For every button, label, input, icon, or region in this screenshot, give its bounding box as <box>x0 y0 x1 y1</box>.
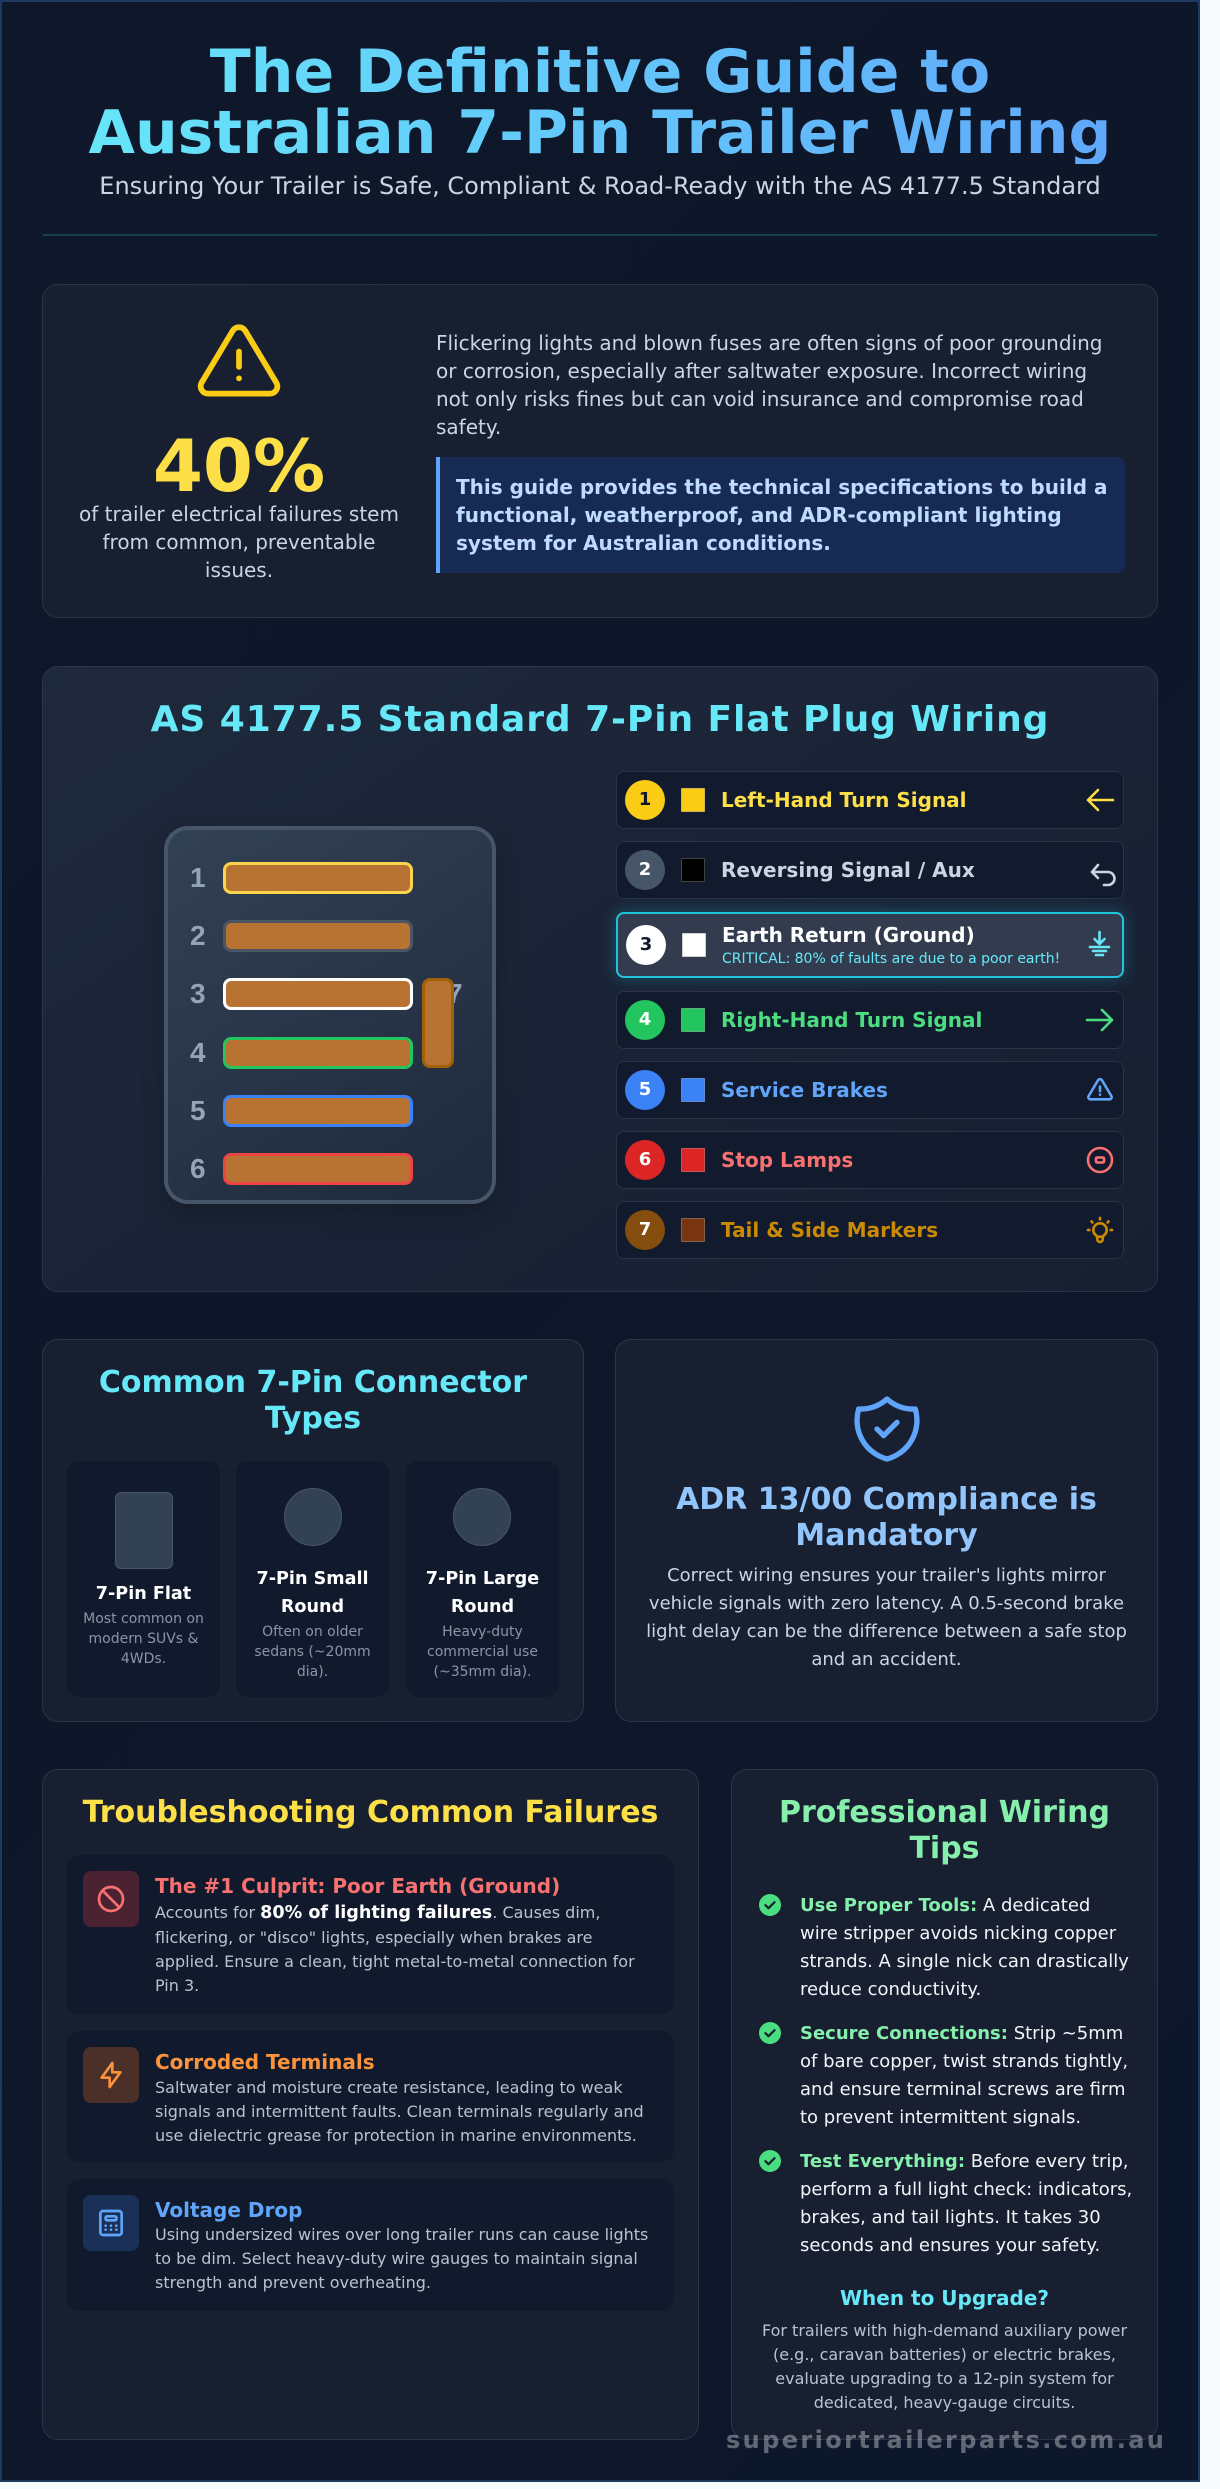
tip: test everything: Test Everything: Before every trip, <box>800 2151 1128 2172</box>
wire swatch <box>681 788 705 812</box>
connector description <box>83 1611 204 1667</box>
pin 1 <box>223 862 413 894</box>
heading: troubleshooting: Troubleshooting Common Failures <box>83 1795 658 1830</box>
connector name: 7-Pin Large <box>426 1569 539 1589</box>
icon: check 1 <box>759 1894 781 1916</box>
tip: secure connections <box>800 2023 1128 2128</box>
pin badge <box>626 925 666 965</box>
icon: large round plug <box>453 1488 511 1546</box>
heading: professional tips: Tips <box>909 1831 980 1866</box>
pin badge <box>625 850 665 890</box>
intro paragraph: not only risks fines but can void insurance and compromise road <box>436 387 1084 411</box>
footer: website: superiortrailerparts.com.au <box>726 2426 1166 2454</box>
connector name: 7-Pin Small <box>256 1569 369 1589</box>
tip: proper tools: strands. A single nick can drastically <box>800 1951 1129 1972</box>
legend row: pin 4 <box>616 991 1124 1049</box>
icon: shield check <box>854 1396 920 1462</box>
callout text <box>456 475 1107 555</box>
pin number 4: 4 <box>190 1037 206 1068</box>
heading: ADR compliance: Mandatory <box>795 1518 978 1553</box>
pin badge: 1 <box>639 789 651 810</box>
card: voltage drop <box>67 2179 674 2311</box>
callout: guide purpose <box>436 457 1125 573</box>
connector description: dia). <box>297 1664 328 1680</box>
title: The Definitive Guide to <box>210 37 990 107</box>
pin function: Service Brakes <box>721 1078 888 1102</box>
panel: professional tips <box>731 1769 1158 2440</box>
heading: professional tips <box>779 1795 1110 1866</box>
wire swatch <box>681 1148 705 1172</box>
pin function: Earth Return (Ground) <box>722 923 975 947</box>
connector description: commercial use <box>427 1644 538 1660</box>
card text: Using undersized wires over long trailer runs can cause lights <box>155 2225 648 2244</box>
card text <box>155 1903 635 1995</box>
card text: signals and intermittent faults. Clean terminals regularly and <box>155 2102 644 2121</box>
stat description: of trailer electrical failures stem <box>79 502 399 526</box>
card heading: The #1 Culprit: Poor Earth (Ground) <box>155 1874 560 1898</box>
tip: test everything: seconds and ensures your safety. <box>800 2235 1100 2256</box>
connector name <box>256 1569 369 1617</box>
card: 7-pin small round <box>236 1461 389 1697</box>
critical note: CRITICAL: 80% of faults are due to a poor earth! <box>722 951 1060 967</box>
card heading: Corroded Terminals <box>155 2050 375 2074</box>
pin 4 <box>223 1037 413 1069</box>
card text: strength and prevent overheating. <box>155 2273 431 2292</box>
heading: connector types: Types <box>265 1401 361 1436</box>
card: corroded terminals <box>67 2031 674 2162</box>
pin number 5: 5 <box>190 1095 206 1126</box>
tip: proper tools: wire stripper avoids nicking copper <box>800 1923 1116 1944</box>
tip: secure connections: and ensure terminal screws are firm <box>800 2079 1126 2100</box>
card text <box>155 2225 648 2292</box>
connector name: Round <box>281 1597 344 1617</box>
intro paragraph: safety. <box>436 415 501 439</box>
pin badge <box>625 780 665 820</box>
pin number 7: 7 <box>447 978 463 1009</box>
callout text: functional, weatherproof, and ADR-compliant lighting <box>456 503 1062 527</box>
pin function: Left-Hand Turn Signal <box>721 788 967 812</box>
icon: bolt <box>83 2047 139 2103</box>
tip: proper tools: reduce conductivity. <box>800 1979 981 2000</box>
icon: stop <box>1086 1146 1114 1174</box>
stat description: from common, preventable <box>102 530 375 554</box>
icon: ground <box>1088 930 1110 956</box>
icon: small round plug <box>284 1488 342 1546</box>
wire swatch <box>681 1218 705 1242</box>
connector description: Most common on <box>83 1611 204 1627</box>
icon: reverse arrow <box>1090 864 1116 886</box>
legend row: pin 2 <box>616 841 1124 899</box>
heading: connector types <box>99 1365 527 1436</box>
icon: right arrow <box>1086 1008 1114 1032</box>
heading: ADR compliance: ADR 13/00 Compliance is <box>676 1482 1097 1517</box>
tip: proper tools: Use Proper Tools: A dedicated <box>800 1895 1090 1916</box>
pin 6 <box>223 1153 413 1185</box>
pin 3 <box>223 978 413 1010</box>
heading: connector types: Common 7-Pin Connector <box>99 1365 527 1400</box>
pin badge: 5 <box>639 1079 651 1100</box>
icon: brake warning <box>1087 1078 1113 1101</box>
connector description: modern SUVs & <box>89 1631 198 1647</box>
connector name: Round <box>451 1597 514 1617</box>
connector name <box>426 1569 539 1617</box>
tip: secure connections: Secure Connections: Strip ~5mm <box>800 2023 1123 2044</box>
subheading: when to upgrade: When to Upgrade? <box>840 2286 1049 2310</box>
compliance text: Correct wiring ensures your trailer's lights mirror <box>667 1565 1106 1586</box>
pin badge <box>625 1210 665 1250</box>
wire swatch <box>681 1078 705 1102</box>
heading: professional tips: Professional Wiring <box>779 1795 1110 1830</box>
card heading: Voltage Drop <box>155 2198 302 2222</box>
heading: wiring standard: AS 4177.5 Standard 7-Pin Flat Plug Wiring <box>151 699 1049 740</box>
card text: Pin 3. <box>155 1976 199 1995</box>
connector description: 4WDs. <box>121 1651 166 1667</box>
tip: test everything <box>800 2151 1132 2256</box>
icon: flat plug <box>115 1492 173 1569</box>
pin badge: 7 <box>639 1219 651 1240</box>
pin function: Tail & Side Markers <box>721 1218 938 1242</box>
pin function: Right-Hand Turn Signal <box>721 1008 982 1032</box>
pin function: Reversing Signal / Aux <box>721 858 975 882</box>
pin function: Stop Lamps <box>721 1148 853 1172</box>
legend row: pin 6 <box>616 1131 1124 1189</box>
title <box>43 42 1157 164</box>
card text: Saltwater and moisture create resistance, leading to weak <box>155 2078 623 2097</box>
card: 7-pin flat <box>67 1461 220 1697</box>
card: poor earth <box>67 1855 674 2014</box>
pin number 3: 3 <box>190 978 206 1009</box>
pin 5 <box>223 1095 413 1127</box>
subtitle: Ensuring Your Trailer is Safe, Compliant & Road-Ready with the AS 4177.5 Standard <box>99 172 1101 200</box>
wire swatch <box>681 858 705 882</box>
connector description: sedans (~20mm <box>254 1644 371 1660</box>
pin badge: 6 <box>639 1149 651 1170</box>
panel: connector types <box>42 1339 584 1722</box>
intro paragraph: or corrosion, especially after saltwater exposure. Incorrect wiring <box>436 359 1087 383</box>
panel: ADR compliance <box>615 1339 1158 1722</box>
legend row: pin 3 highlighted <box>616 912 1124 978</box>
legend row: pin 7 <box>616 1201 1124 1259</box>
intro paragraph <box>436 331 1102 439</box>
panel: 7-pin wiring standard <box>42 666 1158 1292</box>
icon: light bulb <box>1086 1216 1114 1244</box>
compliance text: light delay can be the difference between a safe stop <box>646 1621 1127 1642</box>
pin 2 <box>223 920 413 952</box>
compliance text: vehicle signals with zero latency. A 0.5-second brake <box>649 1593 1124 1614</box>
connector description: Often on older <box>262 1624 363 1640</box>
legend row: pin 1 <box>616 771 1124 829</box>
tip: test everything: brakes, and tail lights. It takes 30 <box>800 2207 1101 2228</box>
intro paragraph: Flickering lights and blown fuses are often signs of poor grounding <box>436 331 1102 355</box>
compliance text: and an accident. <box>811 1649 962 1670</box>
pin number 1: 1 <box>190 862 206 893</box>
tip: secure connections: of bare copper, twist strands tightly, <box>800 2051 1128 2072</box>
upgrade text: dedicated, heavy-gauge circuits. <box>814 2393 1075 2412</box>
pin badge: 3 <box>640 934 652 955</box>
legend row: pin 5 <box>616 1061 1124 1119</box>
pin number 2: 2 <box>190 920 206 951</box>
icon: warning triangle <box>198 324 280 396</box>
pin badge <box>625 1070 665 1110</box>
card text: Accounts for 80% of lighting failures. Causes dim, <box>155 1903 600 1923</box>
pin badge: 2 <box>639 859 651 880</box>
pin badge: 4 <box>639 1009 651 1030</box>
title: Australian 7-Pin Trailer Wiring <box>89 98 1111 168</box>
card text: use dielectric grease for protection in marine environments. <box>155 2126 637 2145</box>
tip: proper tools <box>800 1895 1129 2000</box>
wire swatch <box>681 1008 705 1032</box>
upgrade text <box>762 2321 1128 2412</box>
upgrade text: (e.g., caravan batteries) or electric brakes, <box>773 2345 1116 2364</box>
stat description: issues. <box>205 558 273 582</box>
card text <box>155 2078 644 2145</box>
callout text: This guide provides the technical specifications to build a <box>456 475 1107 499</box>
connector description: Heavy-duty <box>442 1624 523 1640</box>
stat description <box>79 502 399 582</box>
pin 7 <box>422 978 454 1068</box>
icon: ban <box>83 1871 139 1927</box>
panel: problem statistic <box>42 284 1158 618</box>
card text: flickering, or "disco" lights, especially when brakes are <box>155 1928 592 1947</box>
connector description <box>254 1624 371 1680</box>
card text: to be dim. Select heavy-duty wire gauges to maintain signal <box>155 2249 638 2268</box>
icon: calculator <box>83 2195 139 2251</box>
pin badge <box>625 1140 665 1180</box>
card text: applied. Ensure a clean, tight metal-to-metal connection for <box>155 1952 635 1971</box>
compliance text <box>646 1565 1127 1670</box>
tip: test everything: perform a full light check: indicators, <box>800 2179 1132 2200</box>
pin number 6: 6 <box>190 1153 206 1184</box>
icon: check 3 <box>759 2150 781 2172</box>
pin badge <box>625 1000 665 1040</box>
connector name: 7-Pin Flat <box>96 1584 191 1604</box>
connector description <box>427 1624 538 1680</box>
tip: secure connections: to prevent intermittent signals. <box>800 2107 1081 2128</box>
diagram: flat plug face <box>164 826 496 1204</box>
card: 7-pin large round <box>406 1461 559 1697</box>
upgrade text: For trailers with high-demand auxiliary power <box>762 2321 1127 2340</box>
icon: check 2 <box>759 2022 781 2044</box>
connector description: (~35mm dia). <box>434 1664 532 1680</box>
icon: left arrow <box>1086 788 1114 812</box>
heading: ADR compliance <box>676 1482 1097 1553</box>
upgrade text: evaluate upgrading to a 12-pin system for <box>775 2369 1114 2388</box>
wire swatch <box>682 933 706 957</box>
panel: troubleshooting <box>42 1769 699 2440</box>
stat: 40%: 40% <box>153 424 325 508</box>
callout text: system for Australian conditions. <box>456 531 831 555</box>
